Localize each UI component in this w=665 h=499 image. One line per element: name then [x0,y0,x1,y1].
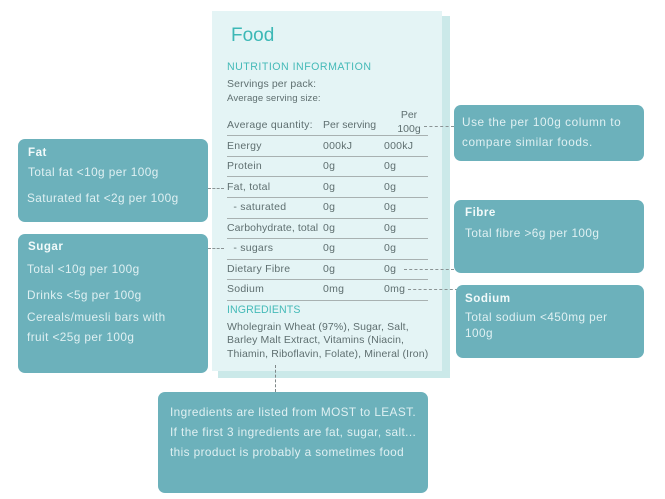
callout: sugar: Total <10g per 100g [27,262,140,276]
table row: dietary fibre: 0g [323,263,335,275]
callout: sugar: Cereals/muesli bars with [27,310,166,324]
table row: saturated: - saturated [233,201,286,213]
table row: saturated [233,201,396,213]
callout: fat: Total fat <10g per 100g [28,165,159,179]
callout: sodium [456,285,644,358]
callout: sodium: Sodium [465,292,511,305]
callout: sugar [18,234,208,373]
table row: energy: 000kJ [323,140,352,152]
panel shadow: label backing [218,16,450,378]
table row: sugars: 0g [323,242,335,254]
connector: sugar [208,248,224,249]
table row: dietary fibre: 0g [384,263,396,275]
table row: fat, total: 0g [323,181,335,193]
connector: fibre [404,269,454,270]
callout: sugar: Sugar [28,240,63,253]
table row: fat, total [227,181,396,193]
heading: ingredients: INGREDIENTS [227,304,300,316]
table row: fat, total: Fat, total [227,181,270,193]
callout: fat: Fat [28,146,47,159]
table row: carbohydrate: 0g [384,222,396,234]
table header: average quantity: Average quantity: [227,119,313,131]
callout: ingredients order: this product is probably a sometimes food [170,445,404,459]
callout: fat: Saturated fat <2g per 100g [27,191,179,205]
table row: saturated: 0g [323,201,335,213]
callout: per 100g tip [454,105,644,161]
text: ingredients list: Wholegrain Wheat (97%), Sugar, Salt, [227,321,409,333]
table row: fat, total: 0g [384,181,396,193]
table row: sugars: 0g [384,242,396,254]
callout: ingredients order: If the first 3 ingredients are fat, sugar, salt... [170,425,416,439]
table row: protein [227,160,396,172]
connector: sodium [408,289,458,290]
table row: carbohydrate [227,222,396,234]
callout: fibre [454,200,644,273]
text: ingredients list: Barley Malt Extract, Vitamins (Niacin, [227,334,404,346]
table row: sodium: 0mg [384,283,405,295]
callout: fibre: Fibre [465,206,496,219]
table row: sugars: - sugars [233,242,273,254]
table row: sodium: 0mg [323,283,344,295]
panel: nutrition label [212,11,442,371]
callout: per 100g tip: Use the per 100g column to [462,115,621,129]
table row: carbohydrate: 0g [323,222,335,234]
callout: ingredients order [158,392,428,493]
table row: sodium [227,283,405,295]
text: average serving size: Average serving size: [227,93,321,104]
table row: energy: 000kJ [384,140,413,152]
connector: fat [208,188,224,189]
table row: saturated: 0g [384,201,396,213]
connector: ingredients [275,365,276,392]
heading: nutrition information: NUTRITION INFORMATION [227,61,371,73]
table row: carbohydrate: Carbohydrate, total [227,222,318,234]
callout: sugar: Drinks <5g per 100g [27,288,142,302]
callout: ingredients order: Ingredients are listed from MOST to LEAST. [170,405,416,419]
table row: protein: Protein [227,160,262,172]
title: Food: Food [231,25,274,46]
table header: per 100g: Per 100g [397,109,421,135]
callout: fibre: Total fibre >6g per 100g [465,226,599,240]
callout: fat [18,139,208,222]
table header: per serving: Per serving [323,119,376,131]
callout: per 100g tip: compare similar foods. [462,135,593,149]
callout: sugar: fruit <25g per 100g [27,330,134,344]
table row: dietary fibre: Dietary Fibre [227,263,290,275]
table row: protein: 0g [384,160,396,172]
table row: sodium: Sodium [227,283,264,295]
connector: per 100g [424,126,454,127]
table row: protein: 0g [323,160,335,172]
text: servings per pack: Servings per pack: [227,78,316,90]
text: ingredients list: Thiamin, Riboflavin, Folate), Mineral (Iron) [227,348,428,360]
callout: sodium: Total sodium <450mg per [465,310,607,324]
table row: dietary fibre [227,263,396,275]
table row: energy: Energy [227,140,262,152]
text: ingredients list [227,321,428,360]
table row: sugars [233,242,396,254]
callout: sodium: 100g [465,326,493,340]
table row: energy [227,140,413,152]
